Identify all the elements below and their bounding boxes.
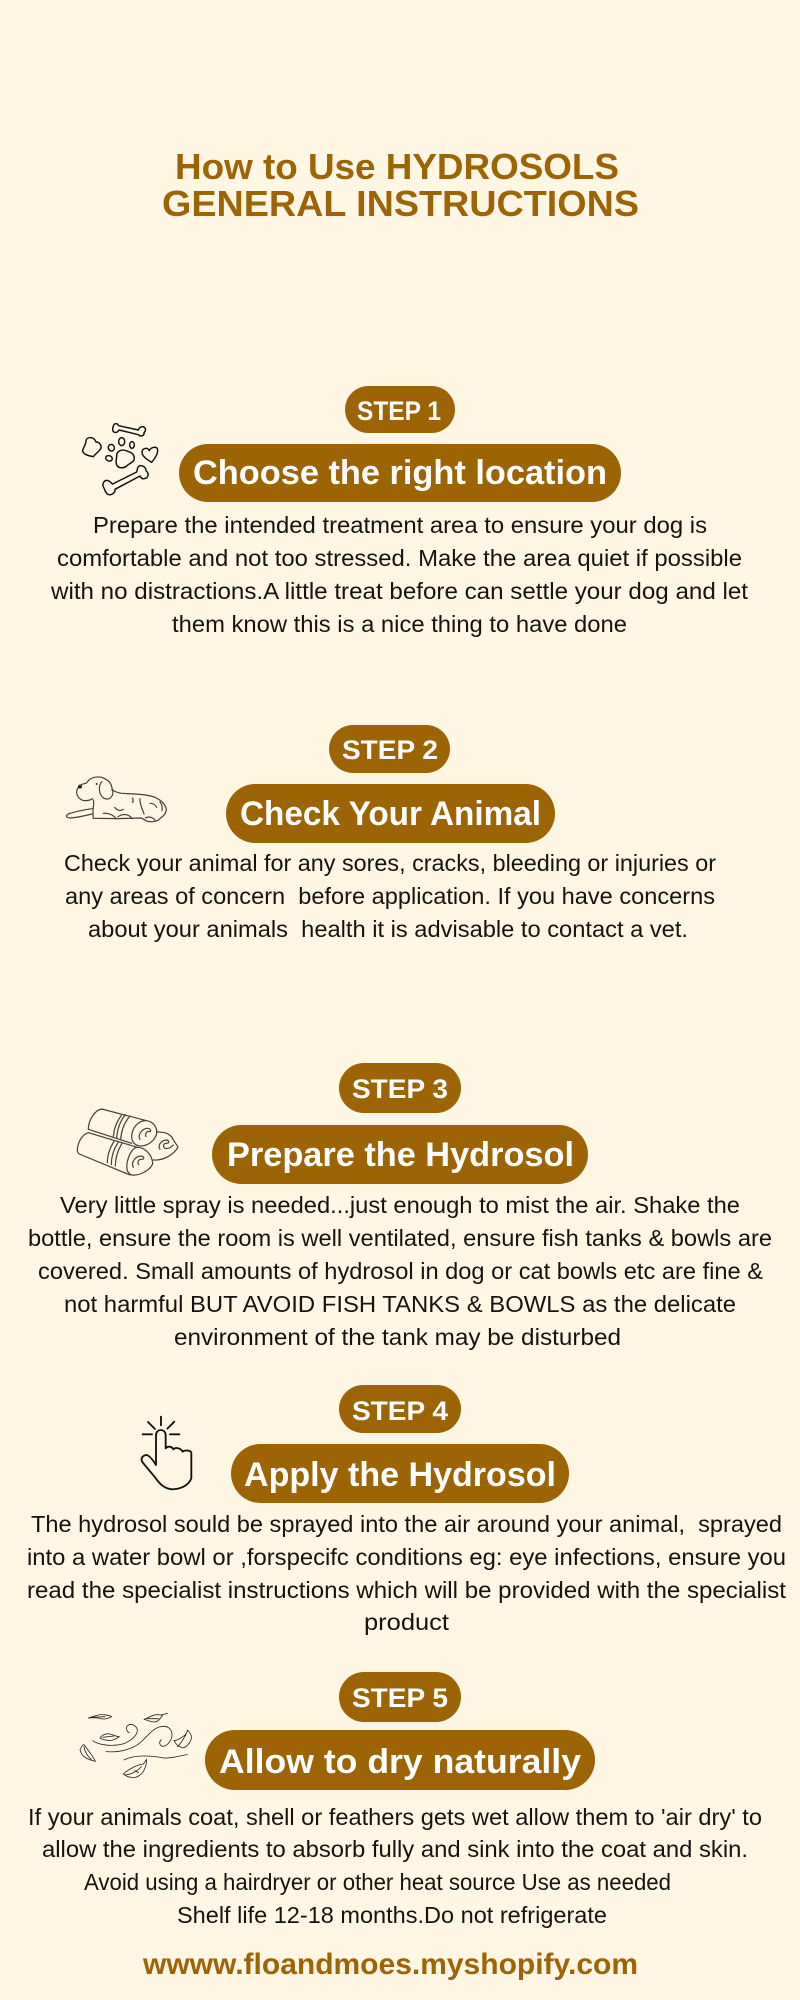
step 3 text xyxy=(28,1192,772,1350)
step 5 heading xyxy=(205,1730,595,1790)
step 3 text: bottle, ensure the room is well ventilated, ensure fish tanks & bowls are xyxy=(28,1225,772,1251)
step 5 badge xyxy=(339,1672,461,1722)
panel: step 2 xyxy=(64,725,716,942)
step 3 heading: Prepare the Hydrosol xyxy=(227,1136,574,1174)
step 2 text: about your animals health it is advisable to contact a vet. xyxy=(88,916,688,942)
step 5 text: Avoid using a hairdryer or other heat source Use as needed xyxy=(84,1869,671,1895)
title: GENERAL INSTRUCTIONS xyxy=(162,183,639,224)
step 2 text: Check your animal for any sores, cracks, bleeding or injuries or xyxy=(64,850,716,876)
panel: step 5 xyxy=(28,1672,762,1928)
icon: rolled towels xyxy=(77,1109,178,1175)
step 5 text: Shelf life 12-18 months.Do not refrigerate xyxy=(177,1902,607,1928)
website footer: wwww.floandmoes.myshopify.com xyxy=(142,1948,638,1981)
step 3 badge: STEP 3 xyxy=(352,1074,448,1104)
step 1 text: Prepare the intended treatment area to ensure your dog is xyxy=(93,512,707,538)
step 3 text: not harmful BUT AVOID FISH TANKS & BOWLS as the delicate xyxy=(64,1291,736,1317)
step 4 text: read the specialist instructions which will be provided with the specialist xyxy=(27,1577,786,1603)
icon: bones, hearts and paw xyxy=(83,424,158,495)
step 5 heading: Allow to dry naturally xyxy=(219,1743,581,1781)
step 1 text: them know this is a nice thing to have done xyxy=(172,611,627,637)
step 5 text: If your animals coat, shell or feathers gets wet allow them to 'air dry' to xyxy=(28,1804,762,1830)
panel: step 4 xyxy=(27,1385,786,1635)
step 2 badge: STEP 2 xyxy=(342,735,438,765)
step 2 badge xyxy=(329,725,450,773)
step 4 heading: Apply the Hydrosol xyxy=(244,1456,556,1494)
step 5 text: allow the ingredients to absorb fully and sink into the coat and skin. xyxy=(42,1836,748,1862)
step 1 text: with no distractions.A little treat before can settle your dog and let xyxy=(50,578,748,604)
step 3 text: covered. Small amounts of hydrosol in dog or cat bowls etc are fine & xyxy=(38,1258,763,1284)
title: How to Use HYDROSOLS xyxy=(175,146,619,187)
step 4 text xyxy=(27,1511,786,1635)
step 2 heading xyxy=(226,784,555,843)
step 1 badge xyxy=(345,386,455,433)
step 4 heading xyxy=(231,1444,569,1503)
step 2 text xyxy=(64,850,716,942)
step 1 heading xyxy=(179,444,621,502)
step 3 text: environment of the tank may be disturbed xyxy=(174,1324,621,1350)
step 2 heading: Check Your Animal xyxy=(240,795,541,833)
step 5 text xyxy=(28,1804,762,1928)
step 3 text: Very little spray is needed...just enough to mist the air. Shake the xyxy=(60,1192,740,1218)
step 4 text: into a water bowl or ,forspecifc conditions eg: eye infections, ensure you xyxy=(27,1544,786,1570)
step 4 badge xyxy=(339,1385,461,1433)
step 2 text: any areas of concern before application. If you have concerns xyxy=(65,883,715,909)
step 1 heading: Choose the right location xyxy=(193,454,607,492)
step 4 text: The hydrosol sould be sprayed into the air around your animal, sprayed xyxy=(31,1511,782,1537)
title xyxy=(162,146,639,224)
icon: tapping hand xyxy=(142,1417,191,1489)
step 5 badge: STEP 5 xyxy=(352,1683,448,1713)
step 3 badge xyxy=(339,1063,461,1113)
panel: step 1 xyxy=(50,386,748,637)
icon: lying dog xyxy=(67,777,166,822)
panel: step 3 xyxy=(28,1063,772,1350)
step 4 badge: STEP 4 xyxy=(352,1396,448,1426)
step 1 text: comfortable and not too stressed. Make the area quiet if possible xyxy=(57,545,742,571)
step 4 text: product xyxy=(364,1609,450,1635)
step 1 badge: STEP 1 xyxy=(357,396,441,426)
icon: wind and leaves xyxy=(80,1713,191,1778)
step 3 heading xyxy=(212,1125,588,1184)
step 1 text xyxy=(50,512,748,637)
